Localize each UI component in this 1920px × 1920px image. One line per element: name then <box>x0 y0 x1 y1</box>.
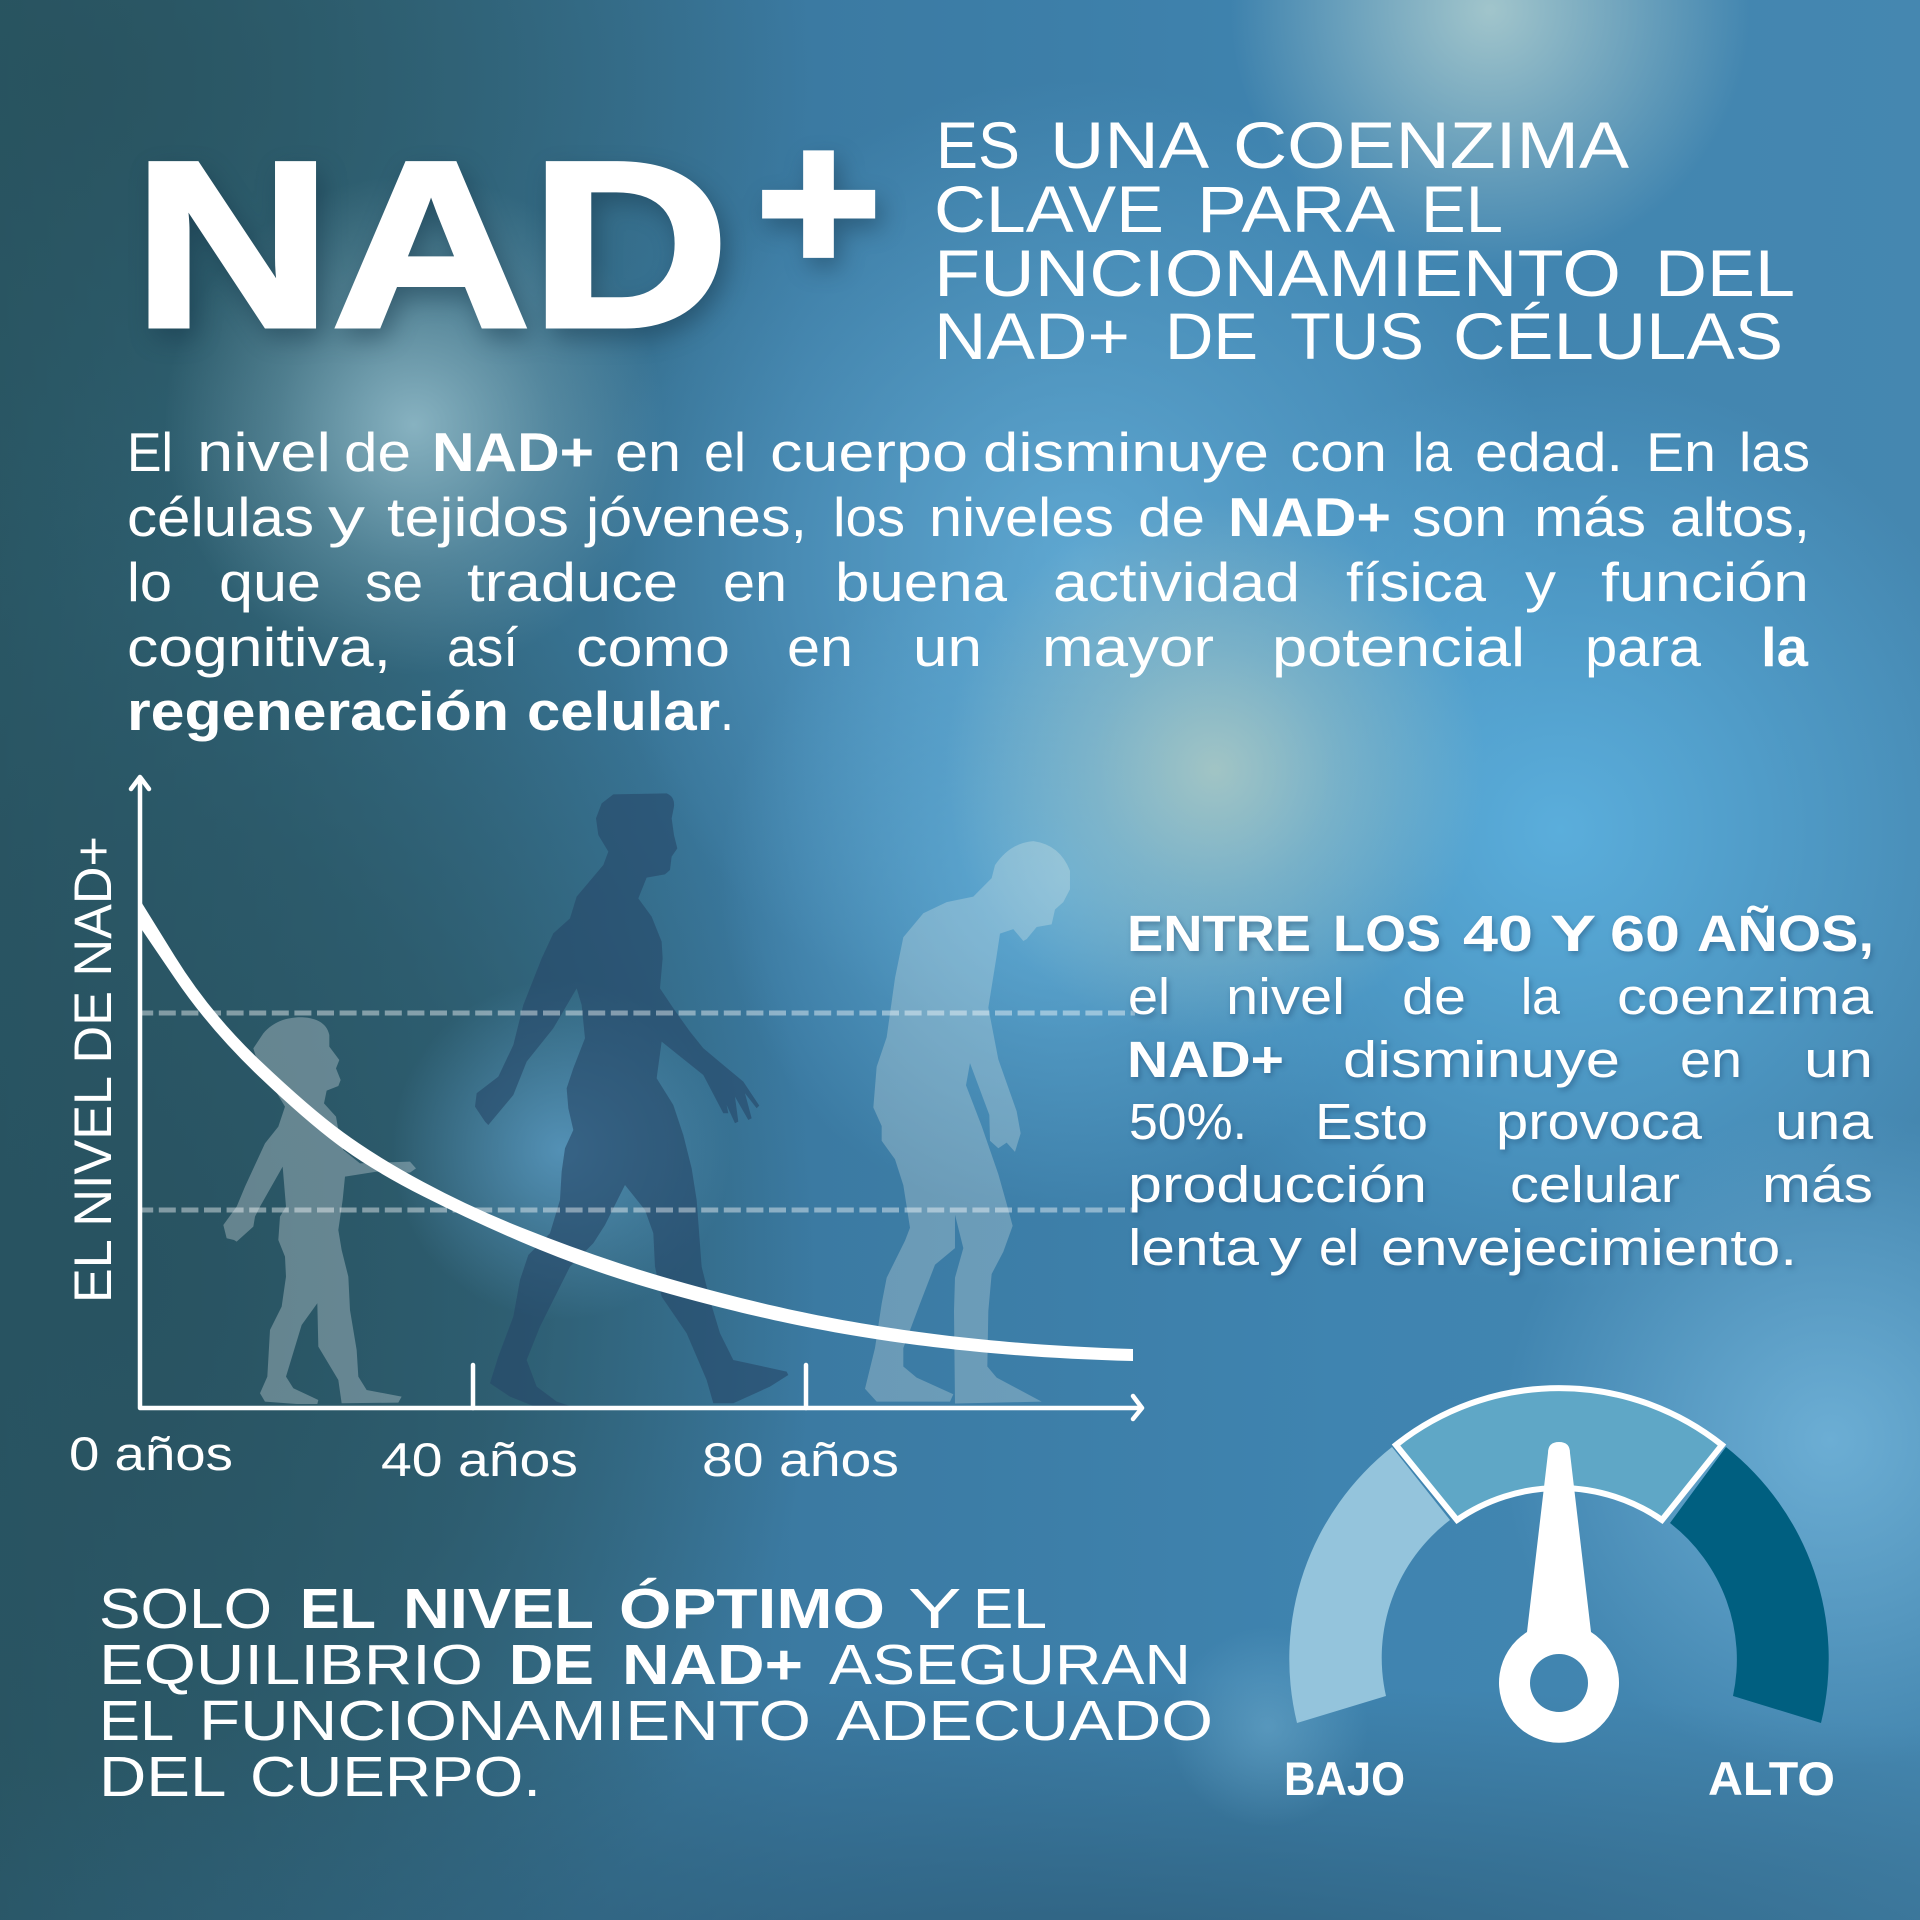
heading: subtitle <box>934 108 1795 373</box>
title: NAD+: + <box>757 91 880 312</box>
text block: intro paragraph: la <box>1413 421 1452 483</box>
text block: intro paragraph: El <box>127 421 173 483</box>
text block: intro paragraph: regeneración <box>127 680 509 742</box>
gauge segment: high <box>1670 1447 1829 1723</box>
text block: optimal level statement: ADECUADO <box>836 1689 1213 1753</box>
text block: optimal level statement: SOLO <box>99 1577 272 1641</box>
text block: intro paragraph: función <box>1601 551 1809 613</box>
text block: intro paragraph: y <box>1525 551 1557 613</box>
callout: 40 to 60 years: la <box>1521 968 1561 1025</box>
callout: 40 to 60 years: ENTRE <box>1127 905 1311 962</box>
heading: subtitle: COENZIMA <box>1233 108 1629 182</box>
text block: optimal level statement: CUERPO. <box>250 1745 541 1809</box>
x axis labels: 40 años <box>381 1433 578 1486</box>
text block: intro paragraph: y <box>328 486 366 548</box>
text block: intro paragraph: cognitiva, <box>127 616 391 678</box>
callout: 40 to 60 years: el <box>1128 968 1170 1025</box>
gauge needle <box>1499 1442 1619 1743</box>
text block: intro paragraph: el <box>704 421 746 483</box>
heading: subtitle: FUNCIONAMIENTO <box>934 236 1621 310</box>
gauge <box>1284 1388 1835 1805</box>
callout: 40 to 60 years: Esto <box>1315 1093 1428 1150</box>
callout: 40 to 60 years: disminuye <box>1343 1031 1620 1088</box>
heading: subtitle: NAD+ <box>934 299 1130 373</box>
callout: 40 to 60 years: producción <box>1128 1156 1427 1213</box>
text block: optimal level statement: DE <box>509 1633 594 1697</box>
text block: intro paragraph: tejidos <box>387 486 569 548</box>
text block: optimal level statement: ÓPTIMO <box>619 1577 885 1641</box>
x axis labels <box>69 1427 899 1486</box>
text block: intro paragraph: jóvenes, <box>584 486 807 548</box>
callout: 40 to 60 years <box>1127 904 1874 1276</box>
heading: subtitle: ES <box>936 108 1020 182</box>
text block: intro paragraph: se <box>365 551 423 613</box>
text block: intro paragraph: cuerpo <box>770 421 968 483</box>
x axis labels: 80 años <box>702 1433 899 1486</box>
text block: intro paragraph: buena <box>835 551 1007 613</box>
heading: subtitle: CLAVE <box>934 172 1164 246</box>
callout: 40 to 60 years: 60 <box>1610 905 1680 962</box>
text block: intro paragraph: así <box>447 616 519 678</box>
title: NAD+ <box>133 91 880 377</box>
text block: intro paragraph: los <box>833 486 905 548</box>
text block: intro paragraph: NAD+ <box>1228 486 1391 548</box>
callout: 40 to 60 years: NAD+ <box>1127 1031 1284 1088</box>
text block: intro paragraph: altos, <box>1670 486 1810 548</box>
text block: optimal level statement: DEL <box>99 1745 224 1809</box>
callout: 40 to 60 years: una <box>1775 1093 1874 1150</box>
callout: 40 to 60 years: 40 <box>1463 905 1533 962</box>
callout: 40 to 60 years: más <box>1762 1156 1873 1213</box>
heading: subtitle: DEL <box>1655 236 1795 310</box>
x axis labels: 0 años <box>69 1427 233 1480</box>
icon: adult silhouette <box>475 793 788 1406</box>
heading: subtitle: EL <box>1421 172 1503 246</box>
text block: intro paragraph: para <box>1585 616 1701 678</box>
gauge label: high: ALTO <box>1708 1752 1835 1805</box>
callout: 40 to 60 years: y <box>1269 1219 1303 1276</box>
icon: child silhouette <box>223 1017 416 1404</box>
chart: NAD+ level by age <box>64 777 1142 1486</box>
text block: intro paragraph: con <box>1290 421 1387 483</box>
text block: intro paragraph: en <box>787 616 853 678</box>
callout: 40 to 60 years: Y <box>1550 905 1596 962</box>
text block: intro paragraph: la <box>1761 616 1808 678</box>
heading: subtitle: PARA <box>1197 172 1395 246</box>
gauge segment: low <box>1289 1447 1450 1723</box>
text block: intro paragraph: niveles <box>929 486 1114 548</box>
text block: intro paragraph: de <box>344 421 411 483</box>
text block: intro paragraph: potencial <box>1272 616 1525 678</box>
text block: optimal level statement: Y <box>908 1577 960 1641</box>
heading: subtitle: TUS <box>1290 299 1424 373</box>
text block: intro paragraph: como <box>576 616 730 678</box>
text block: optimal level statement: EL <box>973 1577 1047 1641</box>
text block: optimal level statement: FUNCIONAMIENTO <box>199 1689 811 1753</box>
text block: intro paragraph: en <box>723 551 787 613</box>
text block: intro paragraph: más <box>1534 486 1646 548</box>
callout: 40 to 60 years: envejecimiento. <box>1381 1219 1797 1276</box>
text block: optimal level statement: EQUILIBRIO <box>99 1633 483 1697</box>
text block: intro paragraph: nivel <box>197 421 331 483</box>
text block: intro paragraph: en <box>615 421 681 483</box>
callout: 40 to 60 years: lenta <box>1128 1219 1260 1276</box>
callout: 40 to 60 years: el <box>1319 1219 1359 1276</box>
text block: intro paragraph: física <box>1346 551 1486 613</box>
text block: intro paragraph: son <box>1412 486 1507 548</box>
callout: 40 to 60 years: de <box>1402 968 1466 1025</box>
icon: elderly silhouette <box>865 841 1070 1404</box>
text block: intro paragraph: células <box>127 486 314 548</box>
text block: intro paragraph: edad. <box>1475 421 1623 483</box>
heading: subtitle: DE <box>1165 299 1258 373</box>
callout: 40 to 60 years: provoca <box>1496 1093 1703 1150</box>
callout: 40 to 60 years: LOS <box>1333 905 1441 962</box>
y axis label: EL NIVEL DE NAD+ <box>64 836 123 1303</box>
text block: optimal level statement: EL <box>300 1577 376 1641</box>
text block: optimal level statement: EL <box>99 1689 172 1753</box>
heading: subtitle: UNA <box>1050 108 1209 182</box>
title: NAD+: NAD <box>133 113 729 377</box>
text block: intro paragraph: En <box>1646 421 1716 483</box>
text block: intro paragraph: . <box>720 680 734 742</box>
text block: optimal level statement: NIVEL <box>403 1577 594 1641</box>
text block: intro paragraph: disminuye <box>983 421 1269 483</box>
text block: optimal level statement: NAD+ <box>622 1633 803 1697</box>
text block: intro paragraph: traduce <box>467 551 678 613</box>
text block: intro paragraph: que <box>219 551 321 613</box>
heading: subtitle: CÉLULAS <box>1453 299 1783 373</box>
text block: intro paragraph: actividad <box>1053 551 1300 613</box>
text block: intro paragraph: celular <box>527 680 720 742</box>
text block: intro paragraph: de <box>1138 486 1205 548</box>
gauge label: low: BAJO <box>1284 1752 1405 1805</box>
callout: 40 to 60 years: 50%. <box>1129 1093 1247 1150</box>
text block: intro paragraph <box>127 421 1810 742</box>
callout: 40 to 60 years: AÑOS, <box>1697 904 1874 962</box>
callout: 40 to 60 years: en <box>1680 1031 1742 1088</box>
callout: 40 to 60 years: un <box>1804 1031 1873 1088</box>
text block: intro paragraph: NAD+ <box>432 421 594 483</box>
text block: intro paragraph: un <box>913 616 982 678</box>
callout: 40 to 60 years: nivel <box>1226 968 1345 1025</box>
text block: intro paragraph: las <box>1739 421 1810 483</box>
callout: 40 to 60 years: coenzima <box>1617 968 1874 1025</box>
text block: optimal level statement: ASEGURAN <box>829 1633 1191 1697</box>
text block: optimal level statement <box>99 1577 1213 1809</box>
text block: intro paragraph: mayor <box>1042 616 1214 678</box>
text block: intro paragraph: lo <box>127 551 172 613</box>
callout: 40 to 60 years: celular <box>1510 1156 1680 1213</box>
gauge segment: optimal <box>1396 1388 1722 1520</box>
curve: declining NAD+ level <box>140 900 1133 1361</box>
axes with arrows and ticks <box>131 777 1142 1419</box>
